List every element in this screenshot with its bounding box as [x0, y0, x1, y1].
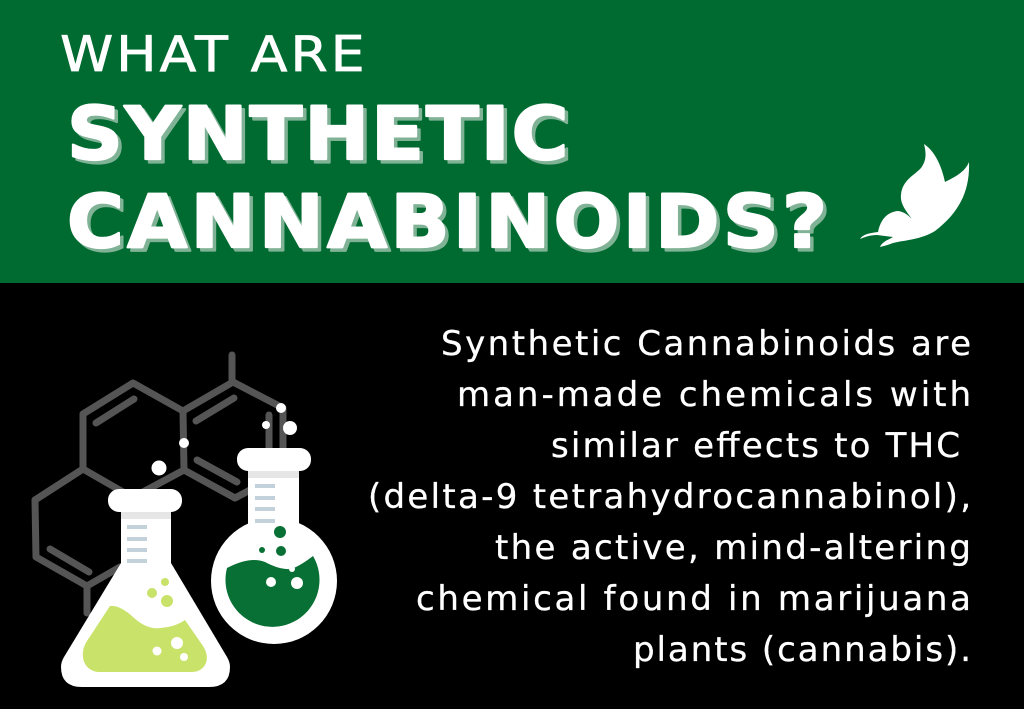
- icon: bubbles above conical flask: [152, 438, 189, 476]
- icon: round flask: [211, 448, 337, 644]
- text block: description: Synthetic Cannabinoids are: [441, 324, 971, 364]
- text block: description: [368, 324, 971, 670]
- heading: synthetic: SYNTHETIC: [67, 91, 568, 176]
- heading: synthetic: SYNTHETIC: [70, 95, 572, 180]
- icon: butterfly logo: [860, 144, 969, 247]
- icon: conical flask: [61, 489, 230, 687]
- text block: description: plants (cannabis).: [633, 630, 971, 670]
- icon: molecule structure: [35, 355, 283, 613]
- text block: description: (delta-9 tetrahydrocannabinol),: [368, 477, 971, 517]
- text block: description: chemical found in marijuana: [416, 579, 971, 619]
- heading: cannabinoids: CANNABINOIDS?: [70, 183, 831, 268]
- text block: description: man-made chemicals with: [457, 375, 971, 415]
- panel: green header: [0, 0, 1024, 283]
- text block: description: the active, mind-altering: [495, 528, 971, 568]
- icon: bubbles above round flask: [262, 403, 297, 435]
- heading: cannabinoids: CANNABINOIDS?: [67, 179, 827, 264]
- text block: description: similar effects to THC: [551, 426, 960, 466]
- heading: what are: WHAT ARE: [60, 26, 365, 83]
- panel: black background: [0, 283, 1024, 709]
